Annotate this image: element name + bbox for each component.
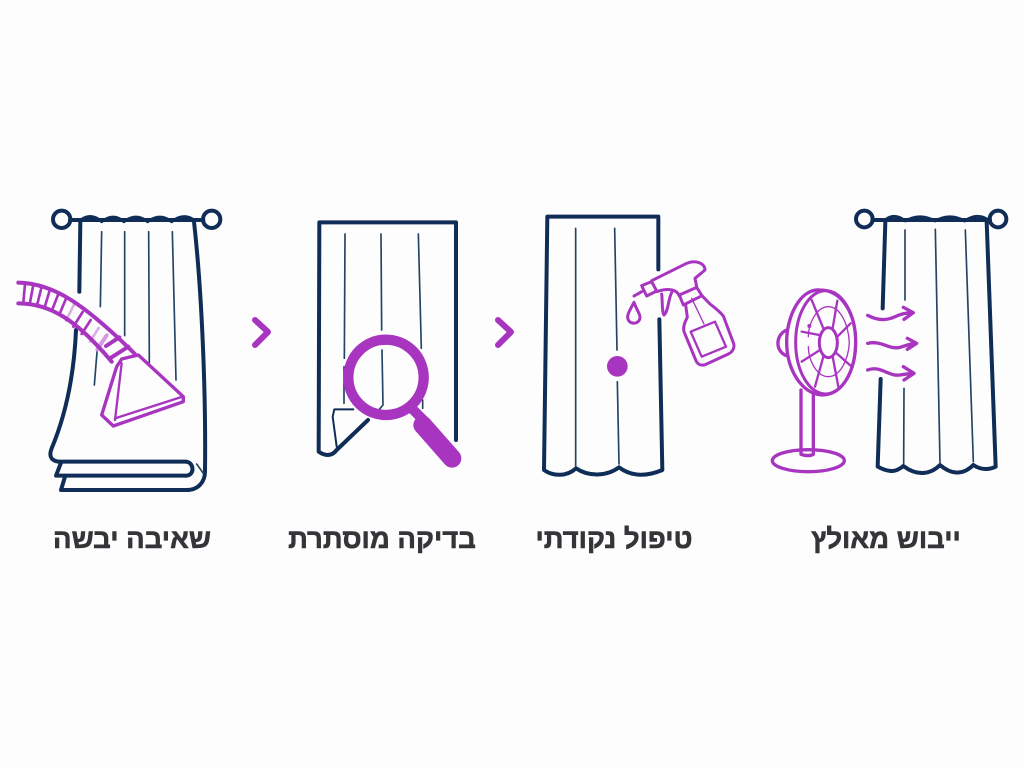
- panel: spot treatment: [544, 217, 734, 475]
- icon: standing fan: [772, 290, 856, 472]
- icon: spray bottle: [628, 262, 734, 365]
- icon: magnifying glass: [348, 340, 452, 458]
- label: dry vacuuming: שאיבה יבשה: [53, 523, 211, 554]
- label: hidden test: בדיקה מוסתרת: [288, 523, 476, 554]
- curtain with scalloped hem: [878, 222, 996, 473]
- arrow: step chevron 1: [255, 320, 268, 345]
- icon: airflow arrows: [868, 307, 917, 380]
- curtain rod with rings: [53, 211, 220, 228]
- panel: dry vacuuming curtain: [18, 211, 220, 490]
- label: forced drying: ייבוש מאולץ: [811, 523, 961, 554]
- label: spot treatment: טיפול נקודתי: [535, 523, 693, 554]
- curtain with scalloped hem: [544, 217, 662, 475]
- icon: stain spot: [607, 356, 628, 377]
- panel: forced drying: [772, 211, 1006, 473]
- curtain with turned corner: [319, 222, 456, 455]
- arrow: step chevron 2: [498, 320, 511, 345]
- gathered curtain with folded hem: [50, 222, 205, 490]
- icon: vacuum hose and nozzle: [18, 283, 183, 426]
- curtain rod with rings: [856, 211, 1006, 227]
- panel: hidden spot test: [319, 222, 456, 458]
